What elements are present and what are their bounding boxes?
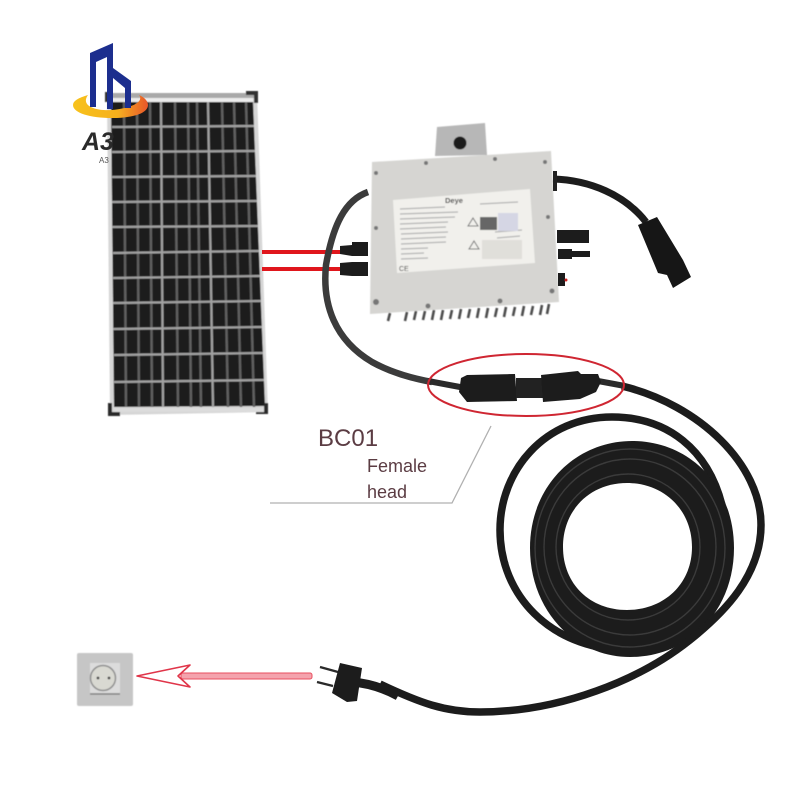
right DC connectors [557, 230, 590, 286]
left DC connectors [340, 242, 368, 276]
highlight ellipse [428, 354, 624, 416]
solar panel [105, 91, 268, 416]
red connection wires [262, 250, 344, 271]
logo swoosh [73, 95, 148, 118]
rating label: Deye [445, 196, 463, 205]
cable outer loop to plug [380, 386, 761, 712]
logo [73, 43, 148, 165]
label: Female head: head [367, 482, 407, 502]
heat sink fins [388, 304, 549, 321]
cable coil [530, 441, 734, 657]
inverter [370, 123, 559, 321]
rating label: CE [399, 266, 409, 273]
inline connector [428, 371, 625, 402]
logo small text: A3 [99, 156, 109, 165]
plug [317, 663, 398, 702]
label: Female head: Female [367, 456, 427, 476]
label: BC01: BC01 [318, 425, 378, 452]
left output cable [325, 192, 432, 382]
leader line [270, 426, 491, 503]
inverter body [370, 151, 559, 314]
wall socket [77, 653, 133, 706]
mounting bracket [435, 123, 487, 156]
screws [373, 157, 554, 308]
rating label [393, 189, 535, 273]
arrow to socket [137, 665, 312, 687]
logo building mark [90, 43, 131, 109]
cable second loop [500, 417, 722, 650]
AC output cable with connector [553, 171, 691, 288]
logo wordmark: A3 [81, 128, 114, 156]
